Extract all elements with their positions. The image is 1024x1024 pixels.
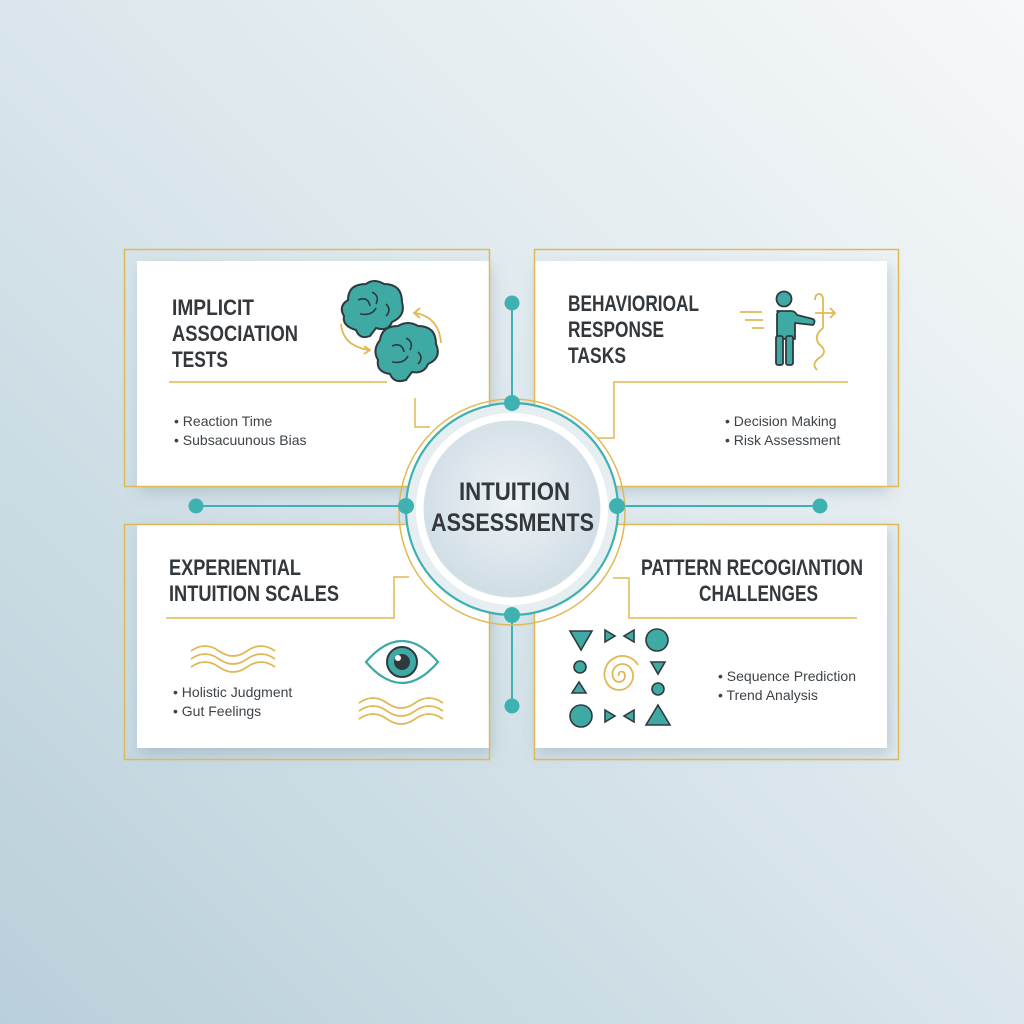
panel: experiential intuition scales [124,524,490,760]
bullets: • Gut Feelings [173,703,261,719]
connector lines [190,296,826,712]
heading: behavioral response tasks [568,291,699,368]
heading: experiential intuition scales [169,555,339,606]
panel: pattern recognition challenges [534,524,898,760]
heading: experiential intuition scales: EXPERIENTIAL [169,555,301,580]
panel: behavioral response tasks [534,250,898,486]
icon: shapes and spiral [570,629,670,727]
icon: waves [191,646,443,724]
center hub [398,395,625,625]
bullets: • Sequence Prediction [718,668,856,684]
bullets: • Risk Assessment [725,432,840,448]
title: ASSESSMENTS [431,509,594,537]
icon: eye [366,641,438,683]
icon: brains [342,281,438,381]
title: INTUITION [459,478,570,506]
heading: pattern recognition challenges: CHALLENGES [699,581,818,606]
heading: implicit association tests [172,295,298,372]
heading: behavioral response tasks: TASKS [568,343,626,368]
bullets: • Holistic Judgment [173,684,292,700]
heading: implicit association tests: TESTS [172,347,228,372]
heading: experiential intuition scales: INTUITION SCALES [169,581,339,606]
heading: pattern recognition challenges [641,555,863,606]
heading: behavioral response tasks: RESPONSE [568,317,664,342]
panel: implicit association tests [124,250,490,486]
heading: implicit association tests: IMPLICIT [172,295,254,320]
bullets: • Subsacuunous Bias [174,432,307,448]
bullets: • Reaction Time [174,413,272,429]
title [431,478,594,537]
heading: pattern recognition challenges: PATTERN RECOGIΛNTION [641,555,863,580]
heading: implicit association tests: ASSOCIATION [172,321,298,346]
bullets: • Decision Making [725,413,837,429]
heading: behavioral response tasks: BEHAVIORIOAL [568,291,699,316]
bullets: • Trend Analysis [718,687,818,703]
icon: person [740,292,835,370]
